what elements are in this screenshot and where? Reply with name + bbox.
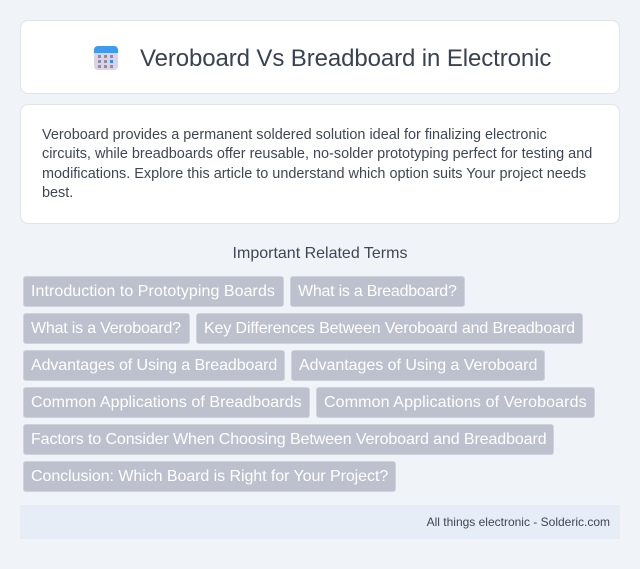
tag: Common Applications of Breadboards [31,394,302,411]
tag: Introduction to Prototyping Boards [31,283,275,300]
tag [196,313,583,344]
tag: Key Differences Between Veroboard and Breadboard [204,320,575,337]
summary text: Veroboard provides a permanent soldered solution ideal for finalizing electronic [42,126,547,142]
tag [23,350,285,381]
icon: calendar [94,46,118,70]
tag: What is a Veroboard? [31,320,181,337]
summary text: circuits, while breadboards offer reusable, no-solder prototyping perfect for testing and [42,146,592,162]
tag [23,424,554,455]
tag: Conclusion: Which Board is Right for Your Project? [31,468,388,485]
tag: Advantages of Using a Breadboard [31,357,277,374]
tag: What is a Breadboard? [298,283,457,300]
footer bar [20,505,620,539]
tag: Factors to Consider When Choosing Between Veroboard and Breadboard [31,431,546,448]
tag [316,387,595,418]
tag: Common Applications of Veroboards [324,394,587,411]
title: Veroboard Vs Breadboard in Electronic [140,45,551,72]
tag [23,313,190,344]
tag [23,387,310,418]
tag [291,350,545,381]
header panel [20,20,620,94]
tag: Advantages of Using a Veroboard [299,357,537,374]
tag [23,461,396,492]
footer text: All things electronic - Solderic.com [427,515,610,529]
summary text: best. [42,185,73,201]
tag [290,276,465,307]
summary text: modifications. Explore this article to understand which option suits Your project needs [42,166,586,182]
tag [23,276,284,307]
related terms heading: Important Related Terms [233,245,407,262]
tag list [23,276,595,492]
summary text [42,126,592,201]
summary panel [20,104,620,224]
